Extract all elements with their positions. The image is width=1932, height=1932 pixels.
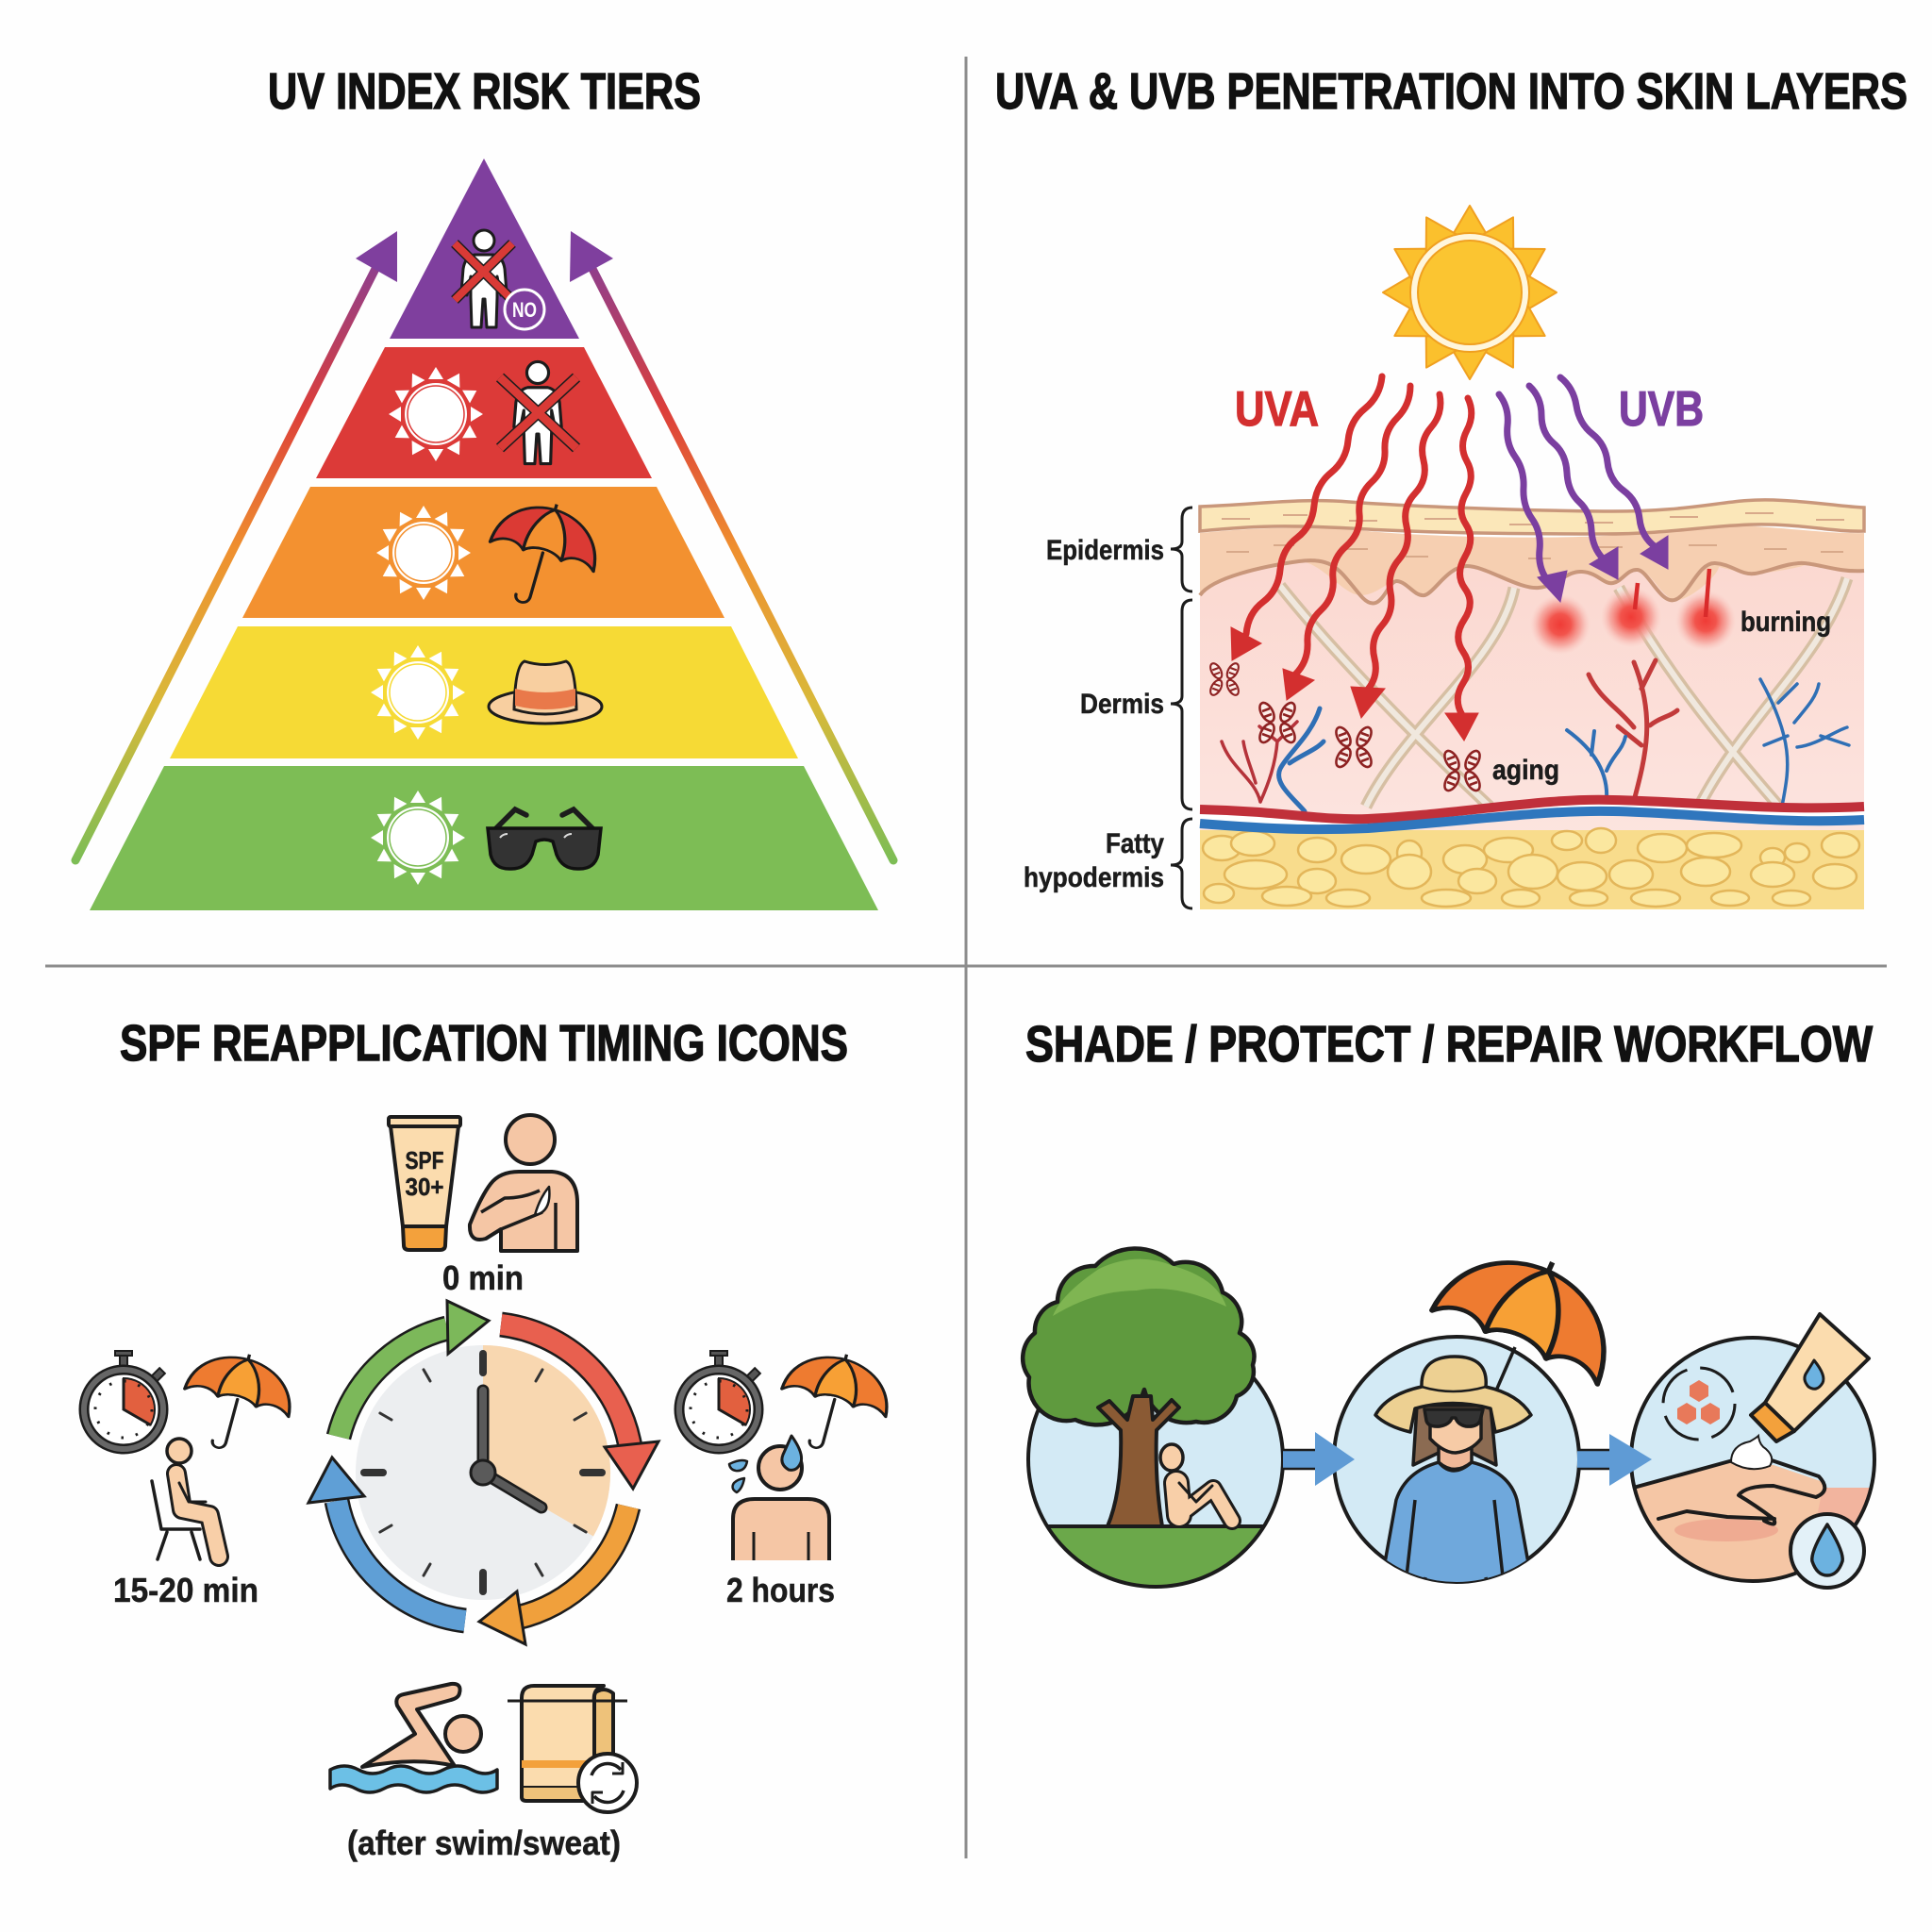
arrow: protect to repair xyxy=(1577,1434,1652,1486)
step: protect with hat and umbrella xyxy=(1332,1260,1607,1584)
damaged collagen clusters xyxy=(1208,661,1483,793)
arrow: orange cycle xyxy=(479,1507,628,1644)
fatty layer xyxy=(1200,828,1864,909)
panel: shade protect repair workflow xyxy=(1023,1016,1877,1594)
icon: SPF tube: 30+ xyxy=(406,1173,443,1201)
chart: clock xyxy=(356,1345,610,1600)
label: Fatty hypodermis xyxy=(1024,819,1192,908)
arrow: left rising risk xyxy=(75,231,397,860)
arrow: green cycle xyxy=(339,1301,489,1437)
label: Fatty hypodermis: hypodermis xyxy=(1024,862,1164,893)
label: burning: burning xyxy=(1740,607,1831,638)
tier: high (orange) xyxy=(242,487,724,619)
icon: stopwatch right xyxy=(679,1351,760,1449)
step: repair with lotion xyxy=(1627,1314,1877,1594)
arrows: UVB rays xyxy=(1499,377,1668,602)
label: UVB: UVB xyxy=(1619,382,1704,437)
tree crown xyxy=(1023,1248,1254,1424)
step: shade under tree xyxy=(1023,1248,1288,1592)
sitting person xyxy=(1160,1444,1232,1521)
icon: stopwatch left xyxy=(84,1351,165,1449)
heading: SPF reapplication timing: SPF REAPPLICATION TIMING ICONS xyxy=(120,1015,848,1072)
label: 2 hours: 2 hours xyxy=(726,1571,835,1609)
label: Fatty hypodermis: Fatty xyxy=(1106,828,1164,859)
tier: extreme (purple): NO xyxy=(512,298,537,322)
icon: seated person xyxy=(152,1439,219,1559)
label: 0 min: 0 min xyxy=(442,1258,524,1297)
panel: SPF reapplication timing xyxy=(84,1015,899,1862)
epidermis lower boundary xyxy=(1200,560,1864,604)
stratum corneum xyxy=(1200,500,1864,534)
epidermis layer xyxy=(1200,525,1864,600)
label: UVA: UVA xyxy=(1235,382,1319,437)
icon: towel with refresh badge xyxy=(508,1686,637,1812)
icon: umbrella right xyxy=(769,1341,899,1463)
burn spots xyxy=(1530,569,1736,655)
diagram: skin cross-section xyxy=(1200,500,1864,909)
icon: person applying sunscreen xyxy=(470,1115,577,1251)
icon: sun xyxy=(1383,206,1557,379)
woman figure xyxy=(1375,1357,1534,1594)
icon: SPF tube xyxy=(389,1117,460,1250)
tier: extreme (purple) xyxy=(390,158,579,339)
icon: lotion tube xyxy=(1751,1314,1869,1441)
icon: umbrella left xyxy=(172,1341,302,1463)
blood vessels xyxy=(1200,660,1864,829)
heading: UV index risk tiers: UV INDEX RISK TIERS xyxy=(268,63,701,120)
icon: cell renewal xyxy=(1663,1368,1735,1440)
arrow: right rising risk xyxy=(570,231,893,860)
label: aging: aging xyxy=(1492,755,1559,786)
tier: very high (red) xyxy=(316,347,652,478)
tree trunk xyxy=(1098,1396,1179,1526)
label: Dermis xyxy=(1080,600,1192,809)
hand and reddened skin xyxy=(1636,1458,1870,1579)
umbrella xyxy=(1432,1225,1635,1391)
label: Dermis: Dermis xyxy=(1080,689,1164,720)
label: Epidermis xyxy=(1046,508,1192,591)
arrow: red cycle xyxy=(501,1324,658,1489)
icon: moisture drop badge xyxy=(1790,1514,1864,1588)
icon: SPF tube: SPF xyxy=(406,1146,443,1174)
tier: low (green) xyxy=(90,766,878,910)
label: Epidermis: Epidermis xyxy=(1046,535,1164,566)
icon: sweating person xyxy=(729,1436,829,1560)
tier: moderate (yellow) xyxy=(170,626,798,758)
label: after swim/sweat: (after swim/sweat) xyxy=(347,1824,621,1862)
collagen fibres xyxy=(1280,578,1847,807)
panel: UV index risk tiers xyxy=(75,63,893,910)
label: 15-20 min: 15-20 min xyxy=(113,1571,258,1609)
arrows: UVA rays xyxy=(1231,376,1478,741)
arrow: blue cycle xyxy=(308,1457,465,1621)
cream dollop xyxy=(1731,1436,1772,1469)
panel: UVA and UVB penetration xyxy=(995,63,1907,909)
arrow: shade to protect xyxy=(1283,1432,1355,1486)
icon: swimmer xyxy=(330,1684,497,1792)
